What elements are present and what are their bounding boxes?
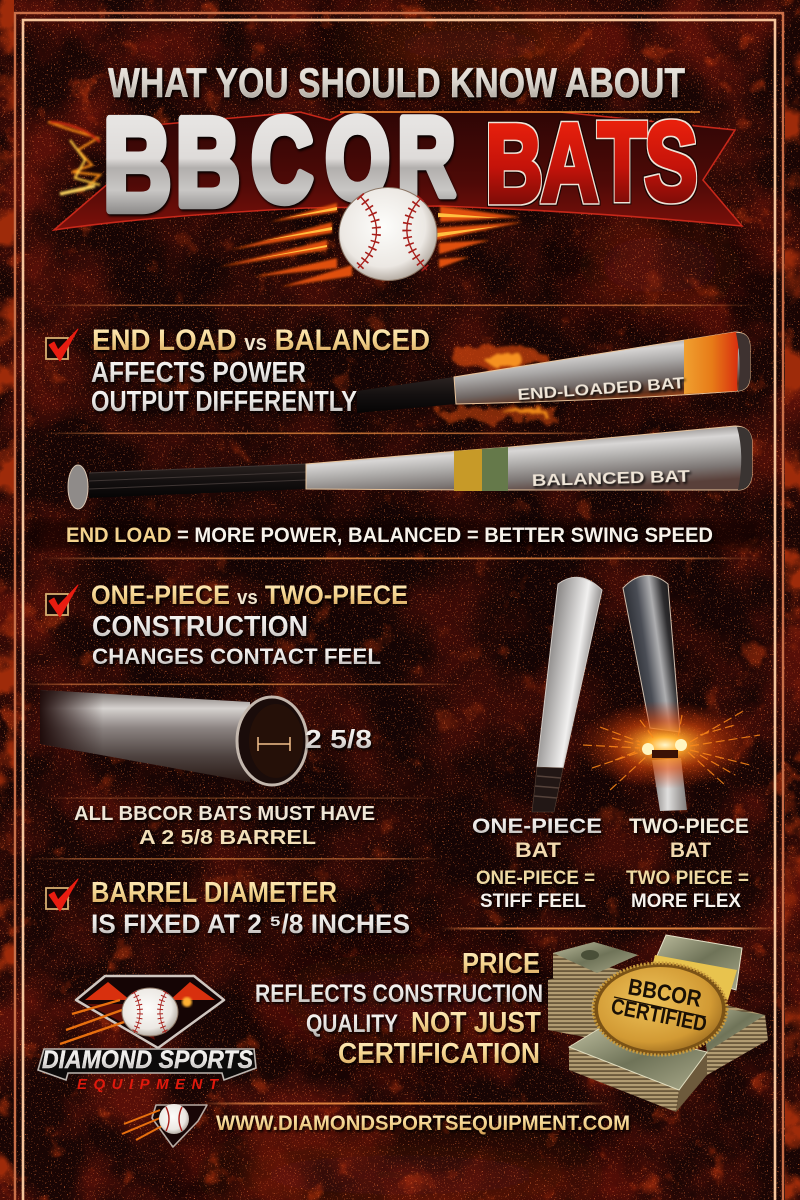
summary: end load vs balanced: END LOAD = MORE POWER, BALANCED = BETTER SWING SPEED [66, 524, 713, 547]
icon: checkbox [46, 329, 78, 361]
baseball [339, 188, 437, 280]
title word BATS: S [644, 100, 698, 224]
icon: diamond [60, 976, 224, 1048]
ribbon shape [54, 112, 742, 230]
coin text: CERTIFIED [609, 993, 709, 1036]
title word BBCOR: B [176, 93, 240, 231]
balanced bat [68, 426, 752, 509]
title word BATS: B [485, 102, 543, 226]
label: one-piece bat: BAT [515, 839, 561, 862]
text: construction: CONSTRUCTION [92, 611, 308, 643]
logo: diamond sports equipment [38, 976, 256, 1093]
barrel illustration [40, 690, 307, 785]
end-loaded bat [357, 332, 750, 413]
flames behind bat [438, 345, 562, 422]
title banner [48, 92, 742, 287]
coin text [609, 973, 709, 1036]
heading: price: PRICE [462, 948, 540, 980]
two-piece bat [623, 575, 687, 811]
text: certification: CERTIFICATION [338, 1038, 540, 1070]
text: equipment: EQUIPMENT [77, 1076, 220, 1093]
text: is fixed at 2 5/8 inches: IS FIXED AT 2 ⁵/8 INCHES [91, 909, 410, 939]
text: changes contact feel: CHANGES CONTACT FEEL [92, 644, 381, 669]
icon: checkbox [46, 879, 78, 911]
text: quality not just: QUALITY [306, 1010, 398, 1038]
text: two piece more flex [626, 868, 749, 912]
text: two piece more flex: TWO PIECE = [626, 868, 749, 889]
icon: logo baseball [122, 988, 178, 1036]
logo plate [38, 1049, 256, 1080]
label: one-piece bat [472, 815, 602, 862]
certified coin [593, 963, 727, 1055]
sparks [575, 701, 760, 790]
coin text: BBCOR [626, 973, 704, 1012]
text: two piece more flex: MORE FLEX [631, 891, 741, 912]
label: two-piece bat [629, 815, 749, 862]
label: balanced bat: BALANCED BAT [532, 468, 690, 490]
title word BATS: A [541, 101, 598, 225]
fire streaks [219, 203, 523, 287]
text: one-piece stiff feel [476, 868, 595, 912]
text: quality not just [306, 1007, 541, 1039]
one-piece bat [532, 577, 602, 812]
heading: end load vs balanced: END LOAD vs BALANCED [92, 324, 430, 357]
panel: end load vs balanced [30, 324, 760, 550]
title word BBCOR: O [325, 95, 390, 223]
panel: bat construction comparison [472, 575, 760, 912]
title word BBCOR: B [103, 92, 172, 239]
text: affects power: AFFECTS POWER [91, 357, 306, 389]
label: two-piece bat: BAT [670, 839, 711, 862]
text: a 2 5/8 barrel: A 2 5/8 BARREL [139, 827, 316, 849]
flame: left of title [48, 122, 100, 194]
panel: price [38, 935, 768, 1112]
heading: one-piece vs two-piece: ONE-PIECE vs TWO-PIECE [91, 580, 408, 610]
glow line [340, 111, 700, 113]
footer logo [122, 1104, 207, 1147]
website url: WWW.DIAMONDSPORTSEQUIPMENT.COM [216, 1112, 630, 1135]
panel: one-piece vs two-piece [20, 580, 460, 939]
money stacks [548, 935, 768, 1112]
title word BBCOR: R [397, 95, 455, 219]
divider [40, 304, 760, 306]
icon: checkbox [46, 585, 78, 617]
title word BATS: T [598, 100, 646, 224]
dimension marker [258, 737, 290, 751]
label: end-loaded bat: END-LOADED BAT [517, 375, 685, 404]
label: one-piece bat: ONE-PIECE [472, 815, 602, 838]
text: diamond sports: DIAMOND SPORTS [42, 1046, 253, 1074]
text: one-piece stiff feel: ONE-PIECE = [476, 868, 595, 889]
text: all bbcor bats must have: ALL BBCOR BATS MUST HAVE [74, 803, 375, 825]
label: two-piece bat: TWO-PIECE [629, 815, 749, 838]
title word BBCOR: C [251, 93, 313, 226]
text: one-piece stiff feel: STIFF FEEL [480, 891, 586, 912]
text: output differently: OUTPUT DIFFERENTLY [91, 386, 357, 418]
text: quality not just: NOT JUST [411, 1007, 541, 1039]
heading: barrel diameter: BARREL DIAMETER [91, 877, 337, 909]
text: reflects construction: REFLECTS CONSTRUCTION [255, 980, 543, 1008]
text: 2 5/8: 2 5/8 [305, 724, 372, 754]
